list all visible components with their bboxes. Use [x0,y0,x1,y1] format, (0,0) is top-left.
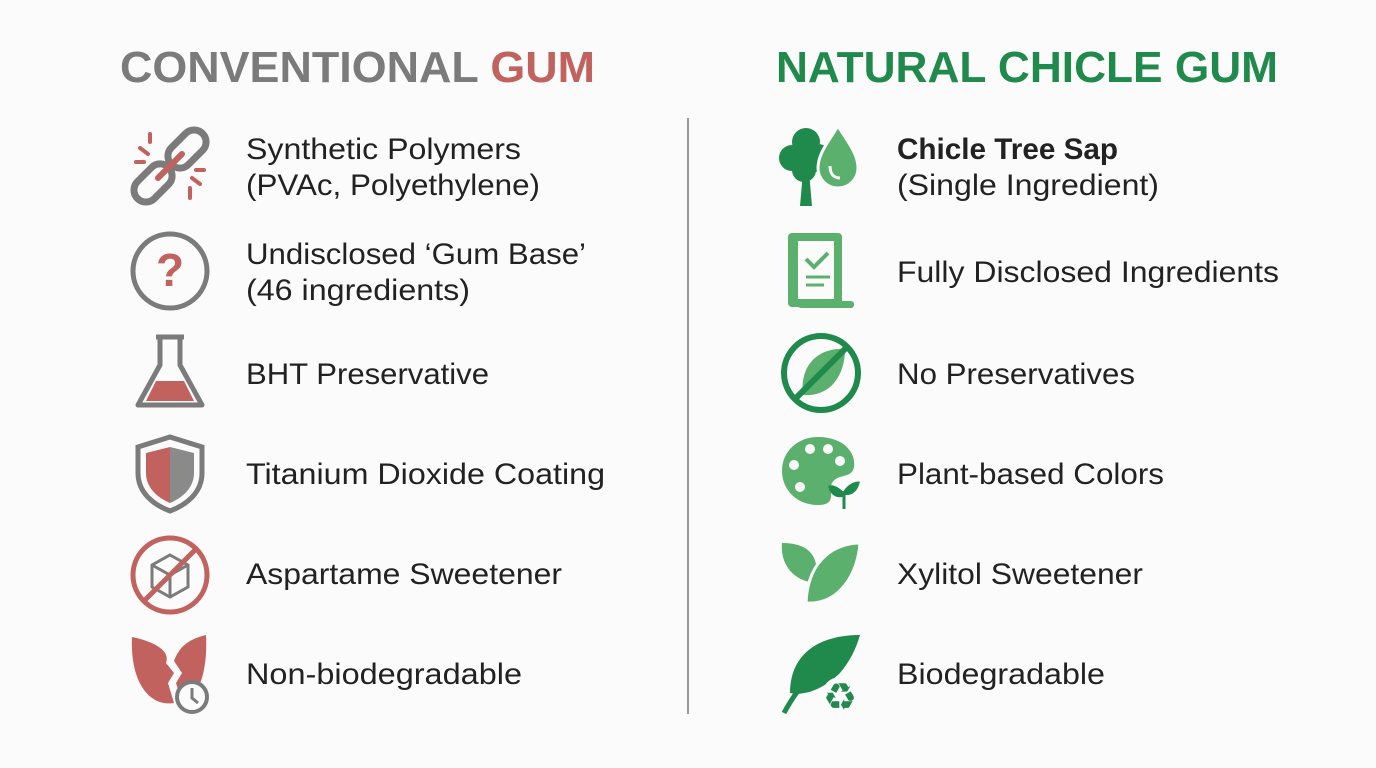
icon: flask [138,337,202,405]
icon: broken leaf clock [132,635,207,712]
title: natural chicle gum: NATURAL CHICLE GUM [776,43,1278,92]
icon: no leaf [784,336,858,410]
text: plant-based colors: Plant-based Colors [897,458,1164,491]
text: undisclosed gum base: (46 ingredients) [246,274,470,307]
text: biodegradable: Biodegradable [897,658,1105,691]
icon: leaves [782,543,860,603]
text: chicle tree sap: Chicle Tree Sap [897,133,1118,166]
text: aspartame: Aspartame Sweetener [246,558,562,591]
icon: palette [782,437,858,509]
icon: shield [138,437,202,511]
text: bht: BHT Preservative [246,358,489,391]
icon: question: ? [156,244,184,296]
text: undisclosed gum base [246,238,586,307]
icon: no sugar cube [133,538,207,612]
icon: leaf recycle: ♻ [823,677,857,719]
title: conventional gum: CONVENTIONAL GUM [120,43,595,92]
text: chicle tree sap: (Single Ingredient) [897,169,1159,202]
text: undisclosed gum base: Undisclosed ‘Gum Base’ [246,238,586,271]
text: fully disclosed: Fully Disclosed Ingredients [897,256,1279,289]
text: non-biodegradable: Non-biodegradable [246,658,522,691]
text: xylitol: Xylitol Sweetener [897,558,1143,591]
text: titanium: Titanium Dioxide Coating [246,458,605,491]
icon: question [133,234,207,308]
panel: natural [779,126,1279,719]
icon: broken chain [129,125,211,207]
text: no preservatives: No Preservatives [897,358,1135,391]
icon: tree and drop [779,126,858,206]
text: synthetic polymers [246,133,540,202]
panel: conventional [129,125,605,712]
text: synthetic polymers: (PVAc, Polyethylene) [246,169,540,202]
text: chicle tree sap [897,133,1159,202]
icon: leaf recycle [784,635,860,719]
text: synthetic polymers: Synthetic Polymers [246,133,521,166]
icon: scroll document [788,233,854,308]
